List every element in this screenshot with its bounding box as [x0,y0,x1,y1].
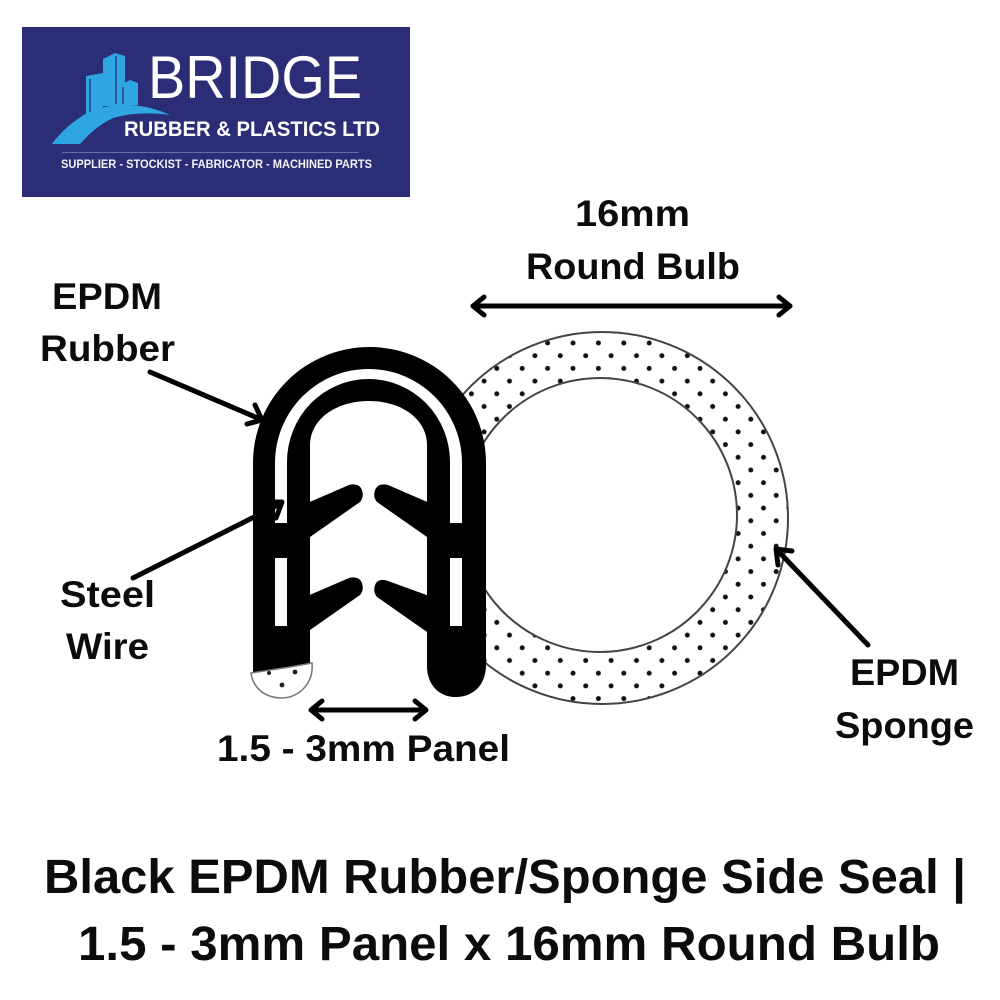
logo wordmark: BRIDGE [148,44,362,111]
logo: Bridge Rubber & Plastics [22,27,410,197]
label: EPDM Sponge [835,652,974,746]
label: EPDM Rubber: EPDM [52,276,162,317]
black rubber U-profile [253,347,486,705]
label: EPDM Sponge: EPDM [850,652,959,693]
label: EPDM Sponge: Sponge [835,705,974,746]
label: 16mm Round Bulb: 16mm [575,193,690,234]
logo tagline: SUPPLIER - STOCKIST - FABRICATOR - MACHINED PARTS [61,157,372,171]
arrow: steel wire [133,502,282,578]
label: 16mm Round Bulb [526,193,740,287]
label: panel range: 1.5 - 3mm Panel [217,728,510,769]
label: Steel Wire [60,574,155,667]
icon: blue buildings and bridge arc [52,53,170,144]
arrow: EPDM sponge [776,549,868,645]
sponge tip on left leg [251,663,312,698]
label: Steel Wire: Steel [60,574,155,615]
label: EPDM Rubber: Rubber [40,328,175,369]
logo company line: RUBBER & PLASTICS LTD [124,118,380,141]
label: Steel Wire: Wire [66,626,149,667]
title: 1.5 - 3mm Panel x 16mm Round Bulb [78,918,940,971]
arrow: bulb width [473,297,790,315]
arrow: panel width [311,701,426,719]
label: 16mm Round Bulb: Round Bulb [526,246,740,287]
steel wire channel [275,369,462,523]
title: Black EPDM Rubber/Sponge Side Seal | [44,851,966,904]
title [44,851,966,971]
diagram: seal cross-section [251,332,788,705]
sponge bulb ring [416,332,788,704]
label: EPDM Rubber [40,276,175,369]
arrow: EPDM rubber [150,372,262,424]
retaining fingers [305,484,432,632]
